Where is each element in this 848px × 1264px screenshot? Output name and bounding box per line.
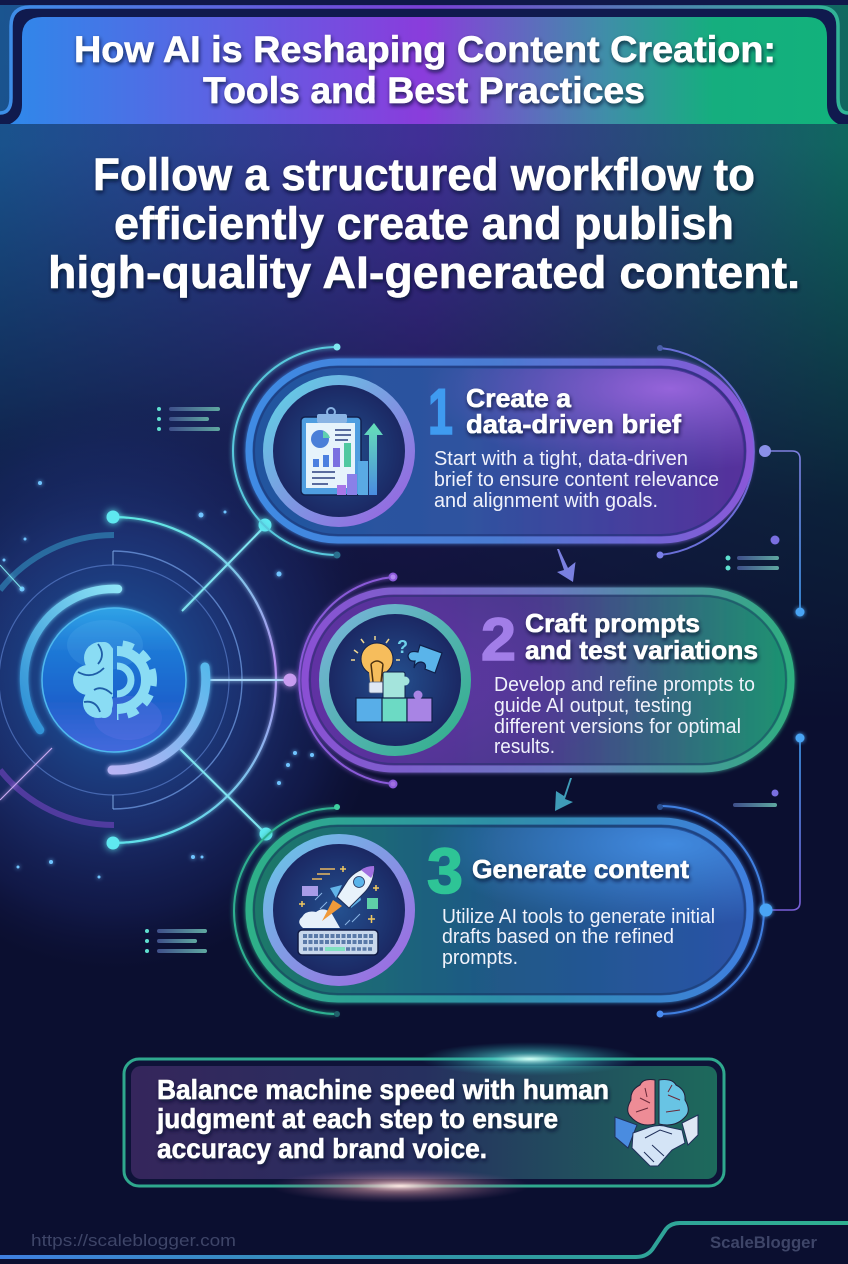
subtitle [48,149,800,298]
heading: Generate content [472,854,689,884]
body [494,674,755,758]
body [434,448,719,512]
title [74,29,776,111]
icon: brain and gear [73,642,153,718]
pill [249,821,750,999]
heading: Craft prompts [525,608,700,638]
pill [305,591,791,769]
callout text: judgment at each step to ensure [156,1103,558,1134]
body: different versions for optimal [494,716,741,738]
callout [124,1042,724,1203]
number 1: 1 [428,375,453,448]
panel: step 1 [233,344,771,558]
footer brand: ScaleBlogger [710,1233,817,1252]
callout text: accuracy and brand voice. [157,1133,487,1164]
body: results. [494,736,555,758]
heading: Create a [466,383,572,413]
subtitle: high-quality AI-generated content. [48,247,800,298]
title: Tools and Best Practices [203,70,645,111]
body: brief to ensure content relevance [434,469,719,491]
decorative small bars [145,407,780,953]
heading [525,608,758,665]
orbit arcs [233,344,771,558]
icon: brain and handshake [615,1080,698,1166]
panel: step 3 [234,804,772,1018]
subtitle: efficiently create and publish [114,198,734,249]
sphere [42,608,186,752]
arrow: step 1 to 2 [557,549,576,582]
number 3: 3 [427,835,463,907]
body: and alignment with goals. [434,490,658,512]
icon: light bulb and puzzle [324,609,466,751]
icon: rocket and keyboard [268,839,410,981]
callout text: Balance machine speed with human [157,1074,609,1105]
icon: light bulb and puzzle: ? [397,637,408,657]
footer url: https://scaleblogger.com [31,1231,236,1250]
panel: step 2 [299,574,791,788]
body: prompts. [442,947,518,969]
heading: and test variations [525,635,758,665]
header banner [0,0,848,124]
scattered light dots [2,481,314,878]
thick arcs [24,589,118,730]
hub nodes [106,510,296,850]
body: drafts based on the refined [442,926,674,948]
connector right: steps 1 to 2 [765,451,804,616]
body: Start with a tight, data-driven [434,448,688,470]
arrow: step 2 to 3 [555,778,573,811]
title: How AI is Reshaping Content Creation: [74,29,776,70]
heading: data-driven brief [466,409,681,439]
heading [466,383,681,439]
body: Utilize AI tools to generate initial [442,906,715,928]
subtitle: Follow a structured workflow to [93,149,755,200]
connector right: steps 2 to 3 [766,734,804,910]
central AI hub graphic [0,481,314,878]
orbit arcs [299,574,396,788]
body: Develop and refine prompts to [494,674,755,696]
orbit arcs [234,804,772,1018]
faint rings [0,517,276,843]
body [442,906,715,969]
callout text [156,1074,609,1164]
pill [249,362,750,540]
spoke lines [0,525,290,834]
number 2: 2 [481,606,516,673]
icon: clipboard chart [268,380,410,522]
body: guide AI output, testing [494,695,692,717]
footer line [0,1223,848,1257]
